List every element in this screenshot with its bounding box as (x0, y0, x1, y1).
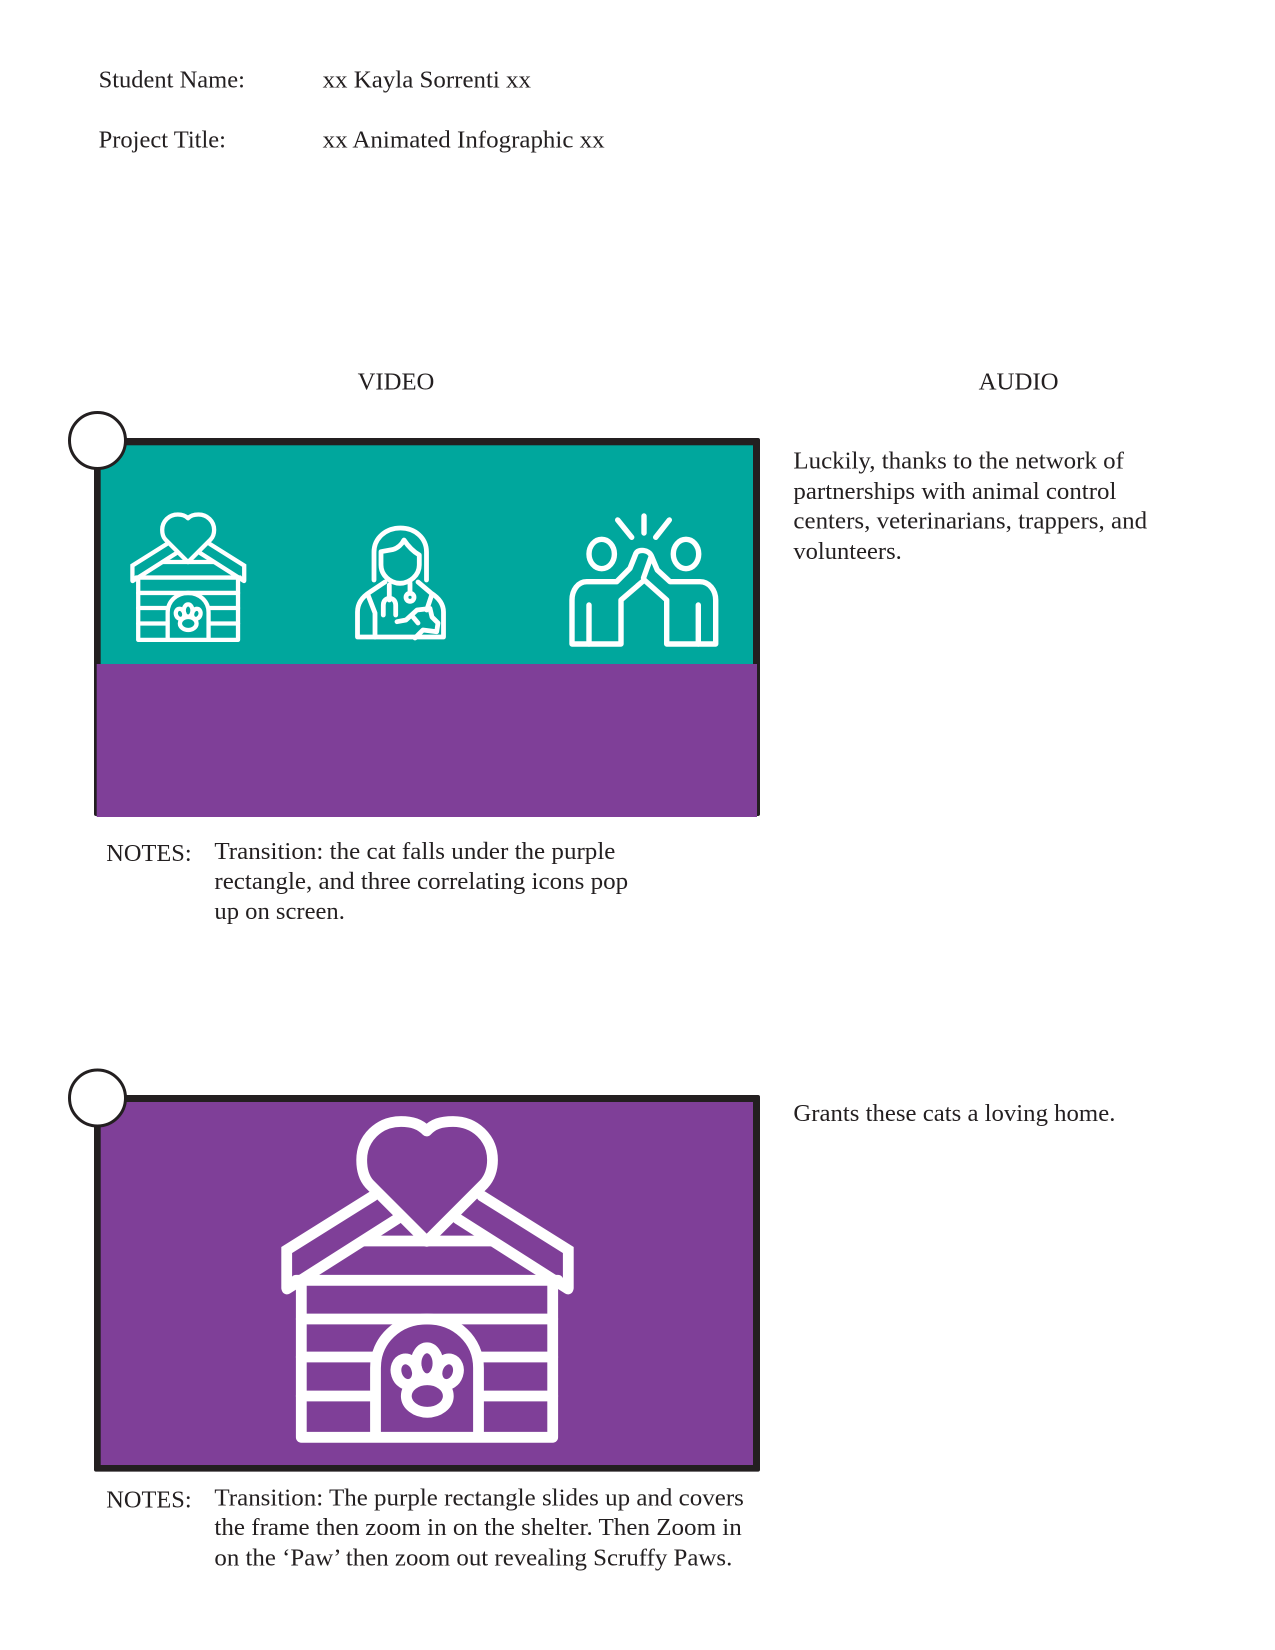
icon: veterinarian with stethoscope (358, 528, 444, 638)
text block: notes 1: up on screen. (214, 898, 345, 925)
heading: video column: VIDEO (358, 368, 434, 396)
heading: audio column: AUDIO (979, 368, 1059, 396)
icon: shelter house with heart (132, 515, 244, 640)
text block: notes 1: Transition: the cat falls under the purple (214, 838, 615, 865)
panel: video frame 1 (94, 438, 760, 817)
icon: large shelter house with heart (287, 1122, 568, 1437)
text block: audio 1: Luckily, thanks to the network of (793, 448, 1125, 474)
student name value: xx Kayla Sorrenti xx (323, 66, 531, 93)
project title value: xx Animated Infographic xx (323, 126, 605, 153)
project title label: Project Title: (99, 126, 226, 153)
header: student name and project title (99, 66, 605, 153)
notes label 2: NOTES: (106, 1486, 192, 1513)
text block: audio 2: Grants these cats a loving home. (793, 1100, 1115, 1127)
text block: notes 2: on the ‘Paw’ then zoom out revealing Scruffy Paws. (214, 1544, 732, 1571)
text block: audio 1: partnerships with animal control (793, 478, 1117, 505)
notes label 1: NOTES: (106, 840, 192, 867)
icon: two people high five (572, 516, 716, 644)
text block: notes 1 (214, 838, 628, 925)
panel: video frame 2 (94, 1095, 760, 1472)
circle marker 2 (70, 1070, 126, 1126)
text block: audio 1: volunteers. (793, 538, 902, 565)
text block: notes 2: the frame then zoom in on the shelter. Then Zoom in (214, 1514, 742, 1541)
student name label: Student Name: (99, 66, 245, 93)
text block: audio 1: centers, veterinarians, trappers, and (793, 508, 1147, 534)
text block: notes 1: rectangle, and three correlating icons pop (214, 868, 628, 895)
text block: audio 1 (793, 448, 1147, 565)
circle marker 1 (70, 412, 126, 468)
text block: notes 2: Transition: The purple rectangle slides up and covers (214, 1484, 744, 1511)
text block: notes 2 (214, 1484, 744, 1571)
